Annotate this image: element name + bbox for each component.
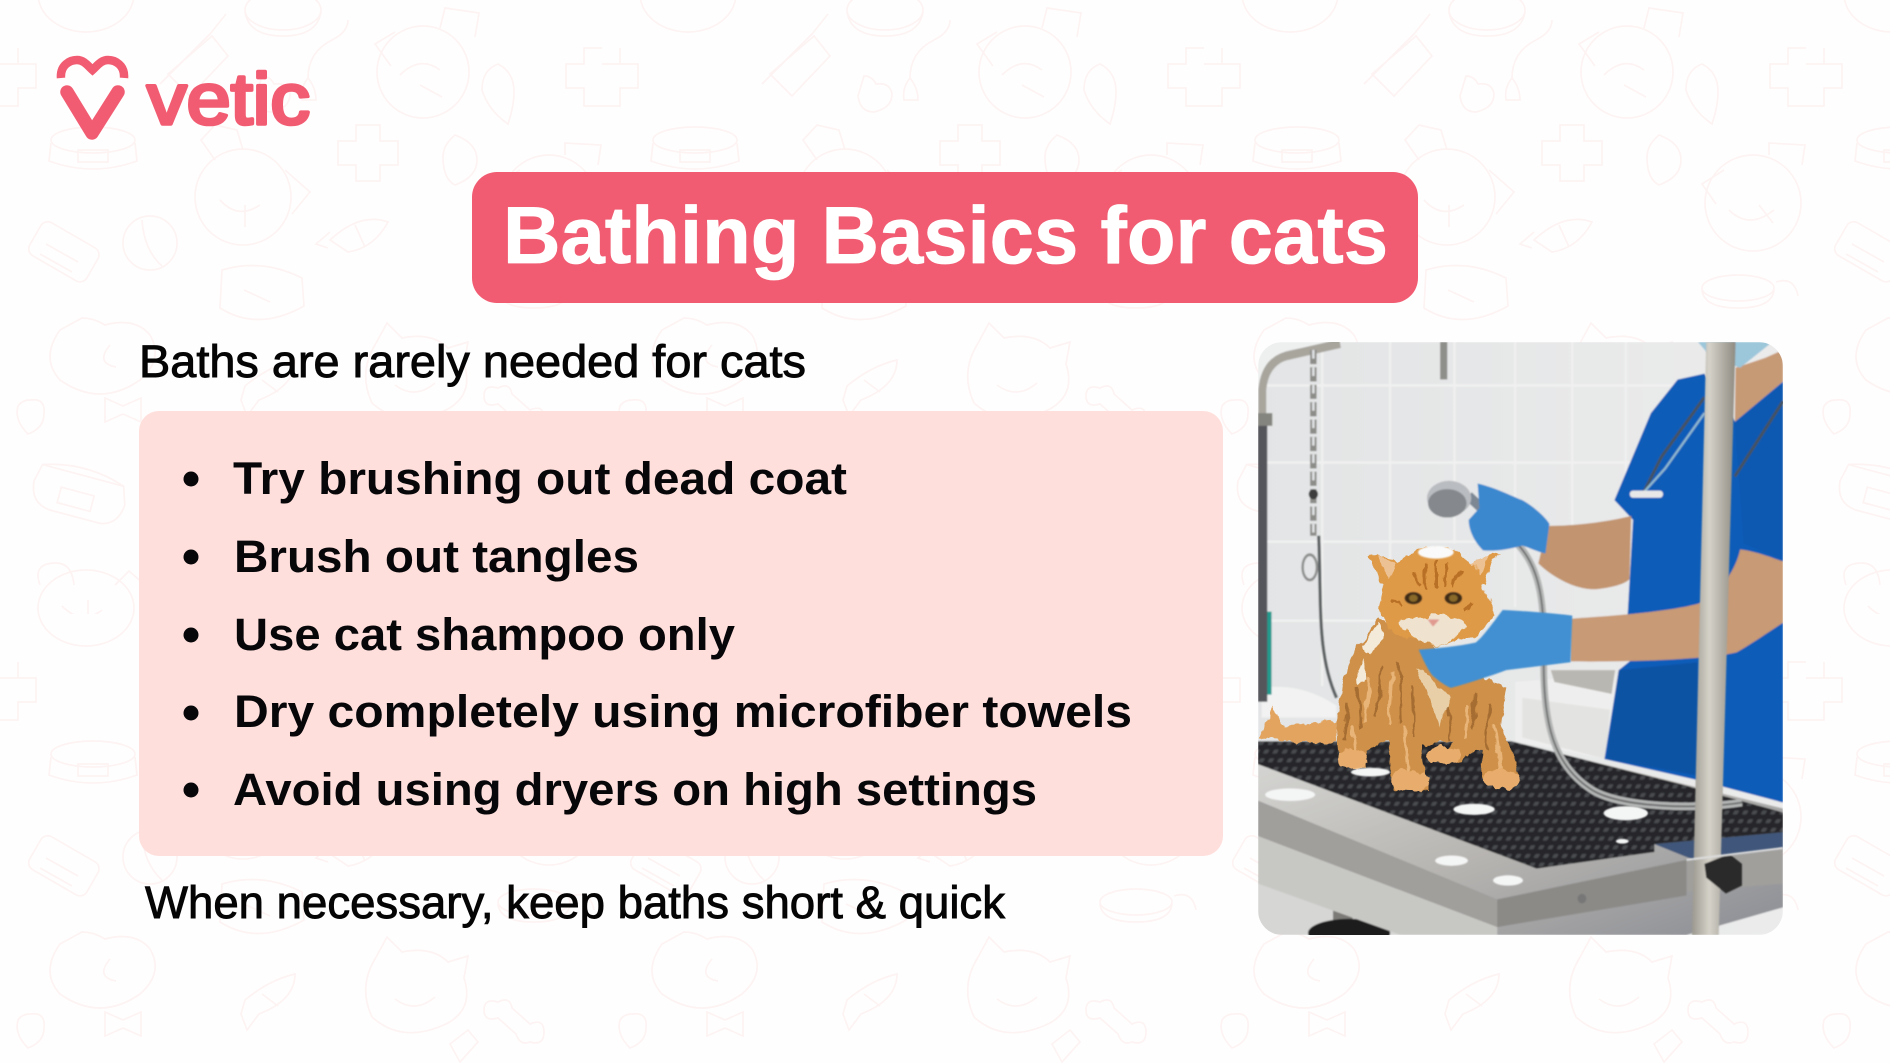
tip 5: Avoid using dryers on high settings [233,764,1037,815]
cat paws [1338,746,1522,793]
lower arm [1570,550,1783,662]
wall tiles [1258,342,1783,935]
panel: bullet tips [139,411,1223,856]
logo: vetic [61,60,310,140]
tip 2: Brush out tangles [234,531,639,582]
upper glove [1469,484,1549,554]
cat [1259,548,1522,793]
shower hose [1515,542,1742,806]
bullet list [184,453,1132,815]
photo: cat being bathed on grooming table [1258,342,1783,935]
title: Bathing Basics for cats [503,191,1388,281]
stethoscope [1644,397,1783,492]
teal bottle [1264,612,1272,695]
title banner [472,172,1418,303]
neck and mask [1735,350,1783,422]
cat face [1405,592,1422,604]
front pole [1692,342,1736,935]
left pole and arm [1258,342,1320,382]
clamp [1704,854,1742,893]
closing text: When necessary, keep baths short & quick [145,877,1005,928]
intro text: Baths are rarely needed for cats [139,336,806,387]
foam [1265,768,1648,886]
shower head [1469,492,1480,512]
tip 1: Try brushing out dead coat [233,453,847,504]
mat [1258,741,1783,869]
tip 3: Use cat shampoo only [234,609,735,660]
table surface [1258,741,1783,935]
tip 4: Dry completely using microfiber towels [234,686,1132,737]
cat head [1367,548,1499,646]
floor and table legs [1258,884,1398,935]
lower glove [1419,610,1572,688]
counter and sink [1262,687,1337,718]
cat body [1337,619,1522,791]
chain and hook [1303,342,1444,698]
upper arm [1538,516,1631,589]
logo wordmark: vetic [147,60,310,140]
scrubs torso [1604,374,1783,803]
icon: heart V mark [61,60,124,133]
cat tail [1259,706,1338,743]
